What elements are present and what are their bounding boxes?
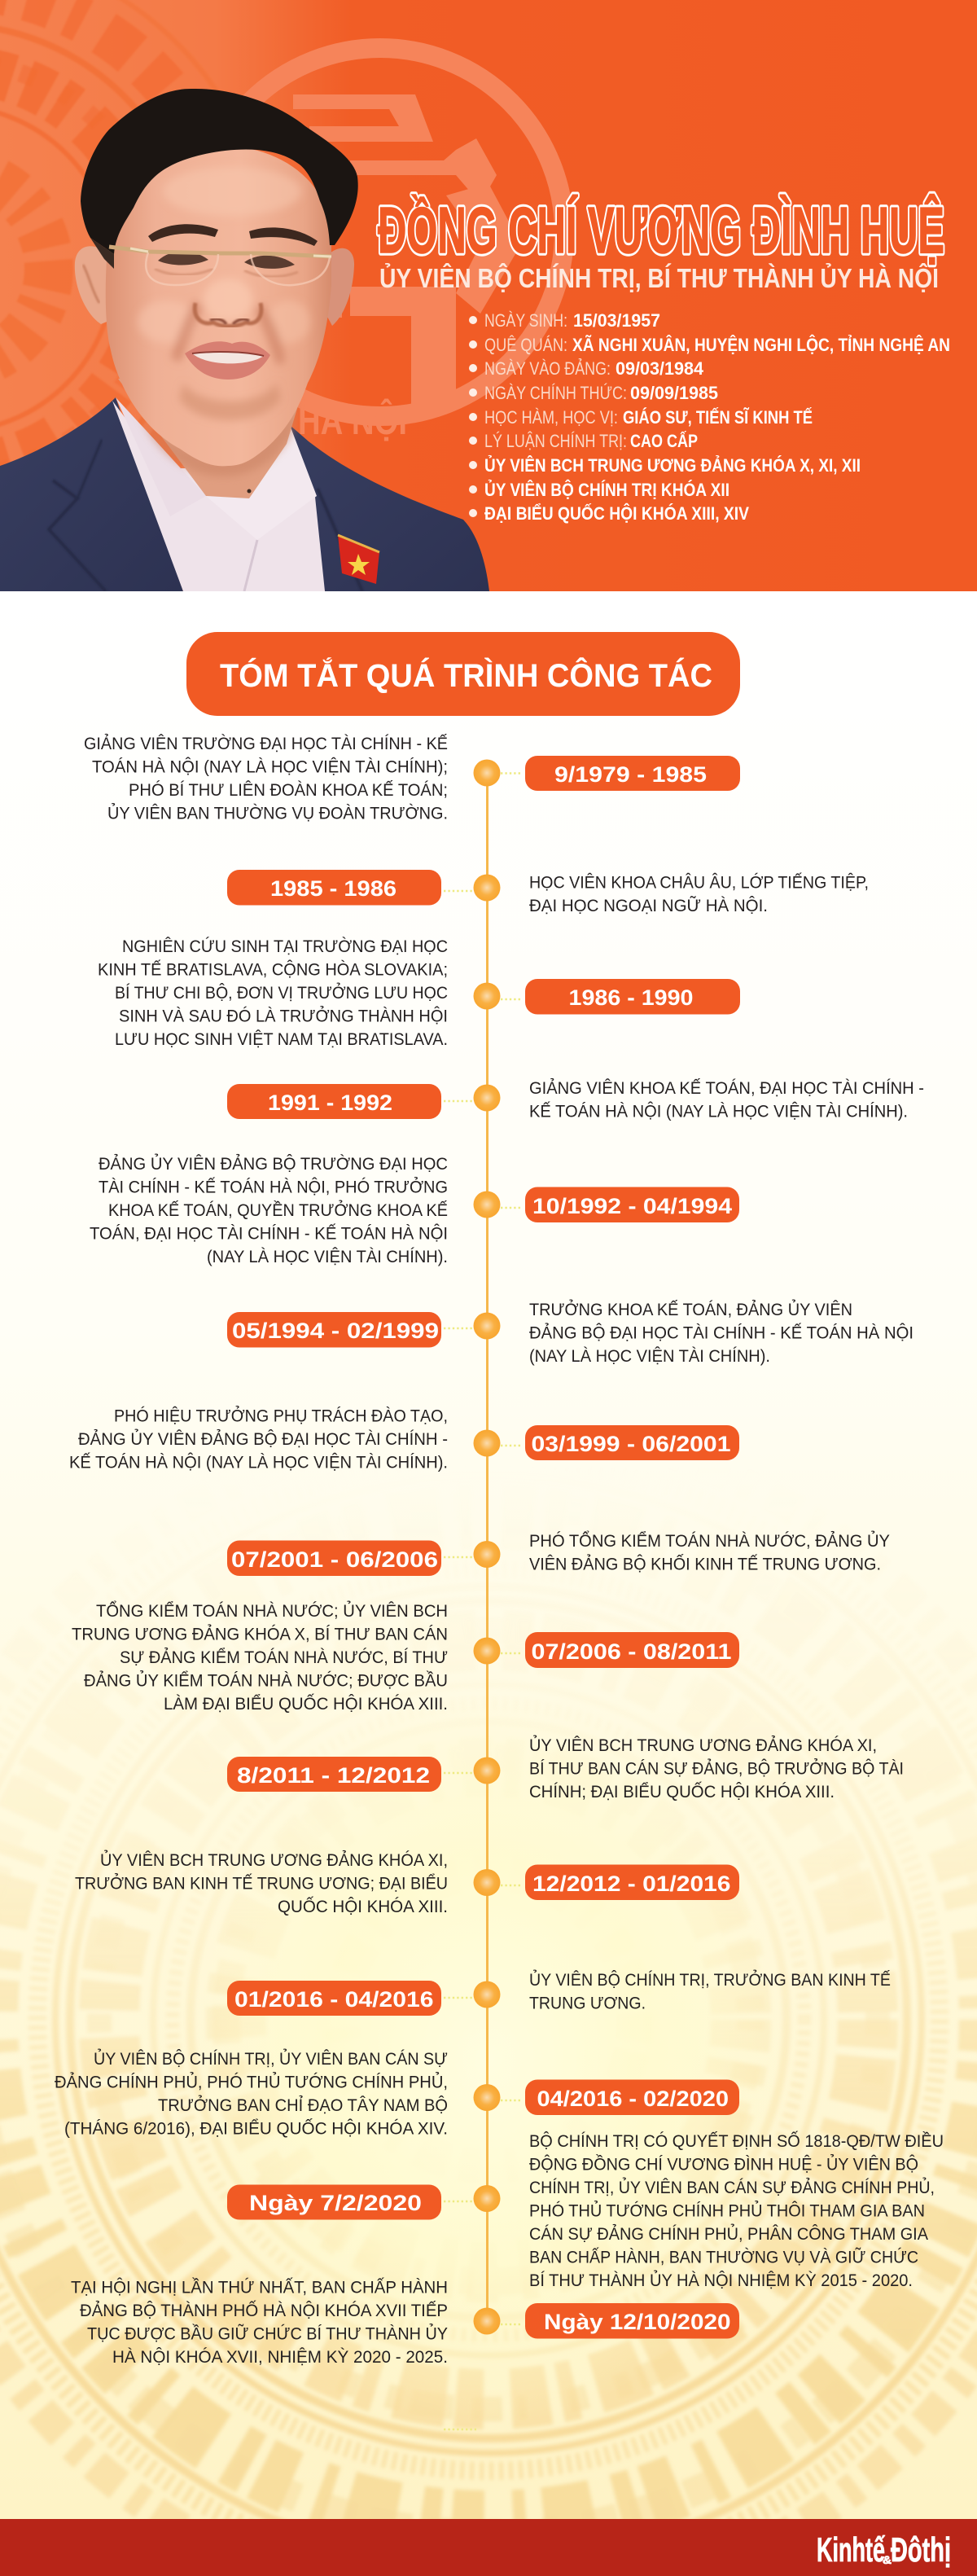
entry 3: 1986 - 1990: KINH TẾ BRATISLAVA, CỘNG HÒA SLOVAKIA;	[98, 959, 448, 979]
footer bar	[0, 2519, 977, 2576]
entry 14: Ngày 7/2/2020: PHÓ THỦ TƯỚNG CHÍNH PHỦ THÔI THAM GIA BAN	[529, 2201, 925, 2220]
personal details list: LÝ LUẬN CHÍNH TRỊ:	[484, 431, 627, 451]
entry 4: 1991 - 1992: KẾ TOÁN HÀ NỘI (NAY LÀ HỌC VIỆN TÀI CHÍNH).	[529, 1101, 908, 1121]
entry 11: 12/2012 - 01/2016: ỦY VIÊN BCH TRUNG ƯƠNG ĐẢNG KHÓA XI,	[100, 1850, 448, 1870]
personal details list: 09/09/1985	[630, 383, 718, 403]
entry 6: 05/1994 - 02/1999	[227, 1299, 913, 1366]
entry 5: 10/1992 - 04/1994: KHOA KẾ TOÁN, QUYỀN TRƯỞNG KHOA KẾ	[108, 1200, 448, 1220]
eyes	[158, 254, 208, 265]
entry 1: 9/1979 - 1985: GIẢNG VIÊN TRƯỜNG ĐẠI HỌC TÀI CHÍNH - KẾ	[84, 733, 448, 753]
entry 8: 07/2001 - 06/2006: VIÊN ĐẢNG BỘ KHỐI KINH TẾ TRUNG ƯƠNG.	[529, 1552, 881, 1573]
entry 11: 12/2012 - 01/2016: TRƯỞNG BAN KINH TẾ TRUNG ƯƠNG; ĐẠI BIỂU	[75, 1873, 448, 1893]
personal details list: 09/03/1984	[616, 358, 704, 379]
entry 8: 07/2001 - 06/2006: PHÓ TỔNG KIỂM TOÁN NHÀ NƯỚC, ĐẢNG ỦY	[529, 1530, 890, 1551]
entry 7: 03/1999 - 06/2001: 03/1999 - 06/2001	[531, 1432, 731, 1456]
entry 11: 12/2012 - 01/2016	[75, 1850, 739, 1916]
personal details list: NGÀY SINH:	[484, 310, 567, 331]
entry 2: 1985 - 1986	[227, 870, 869, 915]
entry 13: 04/2016 - 02/2020: TRƯỞNG BAN CHỈ ĐẠO TÂY NAM BỘ	[158, 2095, 448, 2115]
entry 14: Ngày 7/2/2020: ĐỘNG ĐỒNG CHÍ VƯƠNG ĐÌNH HUỆ - ỦY VIÊN BỘ	[529, 2153, 918, 2174]
entry 2: 1985 - 1986: HỌC VIÊN KHOA CHÂU ÂU, LỚP TIẾNG TIỆP,	[529, 871, 869, 893]
entry 15: Ngày 12/10/2020: TẠI HỘI NGHỊ LẦN THỨ NHẤT, BAN CHẤP HÀNH	[71, 2277, 448, 2297]
entry 9: 07/2006 - 08/2011: ĐẢNG ỦY KIỂM TOÁN NHÀ NƯỚC; ĐƯỢC BẦU	[84, 1670, 448, 1691]
personal details list: CAO CẤP	[630, 431, 698, 451]
entry 5: 10/1992 - 04/1994: TOÁN, ĐẠI HỌC TÀI CHÍNH - KẾ TOÁN HÀ NỘI	[90, 1223, 448, 1243]
entry 3: 1986 - 1990: BÍ THƯ CHI BỘ, ĐƠN VỊ TRƯỞNG LƯU HỌC	[115, 982, 448, 1003]
flag pin	[338, 535, 379, 584]
center glow	[187, 1694, 790, 2427]
personal details list: ỦY VIÊN BỘ CHÍNH TRỊ KHÓA XII	[484, 480, 729, 500]
entry 15: Ngày 12/10/2020: ĐẢNG BỘ THÀNH PHỐ HÀ NỘI KHÓA XVII TIẾP	[80, 2299, 448, 2320]
timeline axis	[486, 773, 488, 2321]
entry 13: 04/2016 - 02/2020	[55, 2048, 739, 2139]
entry 3: 1986 - 1990	[98, 936, 740, 1049]
entry 13: 04/2016 - 02/2020: 04/2016 - 02/2020	[537, 2087, 729, 2111]
entry 3: 1986 - 1990: SINH VÀ SAU ĐÓ LÀ TRƯỞNG THÀNH HỘI	[119, 1005, 448, 1026]
entry 5: 10/1992 - 04/1994: (NAY LÀ HỌC VIỆN TÀI CHÍNH).	[207, 1246, 448, 1266]
entry 1: 9/1979 - 1985: ỦY VIÊN BAN THƯỜNG VỤ ĐOÀN TRƯỜNG.	[107, 803, 448, 823]
entry 9: 07/2006 - 08/2011: SỰ ĐẢNG KIỂM TOÁN NHÀ NƯỚC, BÍ THƯ	[120, 1647, 448, 1667]
personal details list: NGÀY VÀO ĐẢNG:	[484, 358, 611, 379]
hero panel	[0, 0, 977, 591]
entry 8: 07/2001 - 06/2006	[227, 1530, 890, 1576]
entry 3: 1986 - 1990: 1986 - 1990	[568, 985, 694, 1010]
entry 5: 10/1992 - 04/1994: 10/1992 - 04/1994	[532, 1194, 732, 1218]
entry 1: 9/1979 - 1985	[84, 733, 740, 823]
entry 13: 04/2016 - 02/2020: ỦY VIÊN BỘ CHÍNH TRỊ, ỦY VIÊN BAN CÁN SỰ	[94, 2048, 448, 2069]
entry 9: 07/2006 - 08/2011	[72, 1600, 739, 1714]
personal details list: 15/03/1957	[573, 310, 660, 331]
entry 3: 1986 - 1990: NGHIÊN CỨU SINH TẠI TRƯỜNG ĐẠI HỌC	[122, 936, 448, 956]
logo: Kinh tế & Đô thị: Đôthị	[891, 2530, 951, 2569]
personal details list: QUÊ QUÁN:	[484, 335, 567, 355]
neck	[118, 379, 301, 498]
personal details list: NGÀY CHÍNH THỨC:	[484, 383, 627, 403]
entry 9: 07/2006 - 08/2011: TRUNG ƯƠNG ĐẢNG KHÓA X, BÍ THƯ BAN CÁN	[72, 1624, 448, 1643]
entry 9: 07/2006 - 08/2011: TỔNG KIỂM TOÁN NHÀ NƯỚC; ỦY VIÊN BCH	[96, 1600, 448, 1621]
entry 15: Ngày 12/10/2020: TỤC ĐƯỢC BẦU GIỮ CHỨC BÍ THƯ THÀNH ỦY	[87, 2323, 448, 2344]
hero drum pattern	[0, 0, 218, 466]
entry 13: 04/2016 - 02/2020: (THÁNG 6/2016), ĐẠI BIỂU QUỐC HỘI KHÓA XIV.	[64, 2117, 448, 2139]
entry 7: 03/1999 - 06/2001: ĐẢNG ỦY VIÊN ĐẢNG BỘ ĐẠI HỌC TÀI CHÍNH -	[78, 1428, 448, 1449]
entry 5: 10/1992 - 04/1994	[90, 1153, 739, 1266]
personal details list: ĐẠI BIỂU QUỐC HỘI KHÓA XIII, XIV	[484, 502, 749, 524]
section heading	[186, 632, 740, 716]
entry 3: 1986 - 1990: LƯU HỌC SINH VIỆT NAM TẠI BRATISLAVA.	[115, 1029, 448, 1049]
entry 11: 12/2012 - 01/2016: 12/2012 - 01/2016	[532, 1872, 731, 1896]
entry 7: 03/1999 - 06/2001: KẾ TOÁN HÀ NỘI (NAY LÀ HỌC VIỆN TÀI CHÍNH).	[69, 1451, 448, 1472]
entry 7: 03/1999 - 06/2001	[69, 1406, 739, 1472]
entry 2: 1985 - 1986: ĐẠI HỌC NGOẠI NGỮ HÀ NỘI.	[529, 895, 768, 915]
personal details list: GIÁO SƯ, TIẾN SĨ KINH TẾ	[623, 407, 813, 428]
logo: Kinh tế & Đô thị: Kinhtế	[817, 2530, 885, 2569]
entry 14: Ngày 7/2/2020: Ngày 7/2/2020	[249, 2191, 422, 2215]
hair	[81, 89, 358, 254]
nose	[195, 303, 261, 326]
page background	[0, 591, 977, 2519]
entry 5: 10/1992 - 04/1994: ĐẢNG ỦY VIÊN ĐẢNG BỘ TRƯỜNG ĐẠI HỌC	[99, 1153, 448, 1174]
entry 14: Ngày 7/2/2020: CHÍNH TRỊ, ỦY VIÊN BAN CÁN SỰ ĐẢNG CHÍNH PHỦ,	[529, 2177, 935, 2197]
entry 12: 01/2016 - 04/2016: ỦY VIÊN BỘ CHÍNH TRỊ, TRƯỞNG BAN KINH TẾ	[529, 1969, 891, 1990]
entry 14: Ngày 7/2/2020	[227, 2130, 944, 2290]
personal details list: HỌC HÀM, HỌC VỊ:	[484, 407, 618, 428]
entry 10: 8/2011 - 12/2012	[227, 1735, 904, 1801]
emblem text: HÀ NỘI: HÀ NỘI	[298, 398, 407, 443]
entry 14: Ngày 7/2/2020: CÁN SỰ ĐẢNG CHÍNH PHỦ, PHÂN CÔNG THAM GIA	[529, 2223, 929, 2244]
entry 14: Ngày 7/2/2020: BÍ THƯ THÀNH ỦY HÀ NỘI NHIỆM KỲ 2015 - 2020.	[529, 2270, 913, 2290]
entry 12: 01/2016 - 04/2016	[227, 1969, 891, 2016]
entry 10: 8/2011 - 12/2012: 8/2011 - 12/2012	[237, 1763, 430, 1788]
face shading	[138, 167, 310, 420]
entry 14: Ngày 7/2/2020: BỘ CHÍNH TRỊ CÓ QUYẾT ĐỊNH SỐ 1818-QĐ/TW ĐIỀU	[529, 2130, 944, 2151]
entry 15: Ngày 12/10/2020	[71, 2277, 739, 2367]
suit	[0, 397, 183, 591]
face	[106, 145, 331, 466]
mouth	[185, 341, 270, 380]
timeline dots and connectors	[444, 759, 523, 2429]
logo: Kinh tế & Đô thị: &	[883, 2553, 892, 2566]
eyebrows	[148, 224, 218, 242]
mole	[248, 489, 251, 494]
glasses	[109, 247, 331, 285]
personal details list: ỦY VIÊN BCH TRUNG ƯƠNG ĐẢNG KHÓA X, XI, XII	[484, 455, 861, 476]
entry 12: 01/2016 - 04/2016: TRUNG ƯƠNG.	[529, 1994, 646, 2013]
entry 4: 1991 - 1992	[227, 1077, 924, 1121]
entry 7: 03/1999 - 06/2001: PHÓ HIỆU TRƯỞNG PHỤ TRÁCH ĐÀO TẠO,	[114, 1406, 448, 1425]
entry 4: 1991 - 1992: GIẢNG VIÊN KHOA KẾ TOÁN, ĐẠI HỌC TÀI CHÍNH -	[529, 1077, 924, 1098]
entry 14: Ngày 7/2/2020: BAN CHẤP HÀNH, BAN THƯỜNG VỤ VÀ GIỮ CHỨC	[529, 2246, 918, 2267]
entry 8: 07/2001 - 06/2006: 07/2001 - 06/2006	[231, 1547, 438, 1572]
entry 10: 8/2011 - 12/2012: BÍ THƯ BAN CÁN SỰ ĐẢNG, BỘ TRƯỞNG BỘ TÀI	[529, 1758, 904, 1779]
entry 6: 05/1994 - 02/1999: (NAY LÀ HỌC VIỆN TÀI CHÍNH).	[529, 1345, 770, 1366]
entry 15: Ngày 12/10/2020: HÀ NỘI KHÓA XVII, NHIỆM KỲ 2020 - 2025.	[112, 2346, 448, 2367]
entry 11: 12/2012 - 01/2016: QUỐC HỘI KHÓA XIII.	[278, 1895, 448, 1916]
background pattern: bronze drum	[0, 1663, 977, 2519]
hero background	[0, 0, 977, 591]
entry 1: 9/1979 - 1985: PHÓ BÍ THƯ LIÊN ĐOÀN KHOA KẾ TOÁN;	[129, 779, 448, 800]
entry 9: 07/2006 - 08/2011: LÀM ĐẠI BIỂU QUỐC HỘI KHÓA XIII.	[164, 1692, 448, 1714]
portrait	[0, 89, 489, 591]
entry 12: 01/2016 - 04/2016: 01/2016 - 04/2016	[234, 1987, 433, 2012]
ears	[75, 246, 107, 324]
section heading: TÓM TẮT QUÁ TRÌNH CÔNG TÁC	[220, 656, 712, 694]
entry 6: 05/1994 - 02/1999: 05/1994 - 02/1999	[232, 1319, 439, 1343]
entry 5: 10/1992 - 04/1994: TÀI CHÍNH - KẾ TOÁN HÀ NỘI, PHÓ TRƯỞNG	[99, 1176, 448, 1197]
entry 9: 07/2006 - 08/2011: 07/2006 - 08/2011	[531, 1639, 731, 1664]
personal details list	[469, 310, 950, 524]
entry 13: 04/2016 - 02/2020: ĐẢNG CHÍNH PHỦ, PHÓ THỦ TƯỚNG CHÍNH PHỦ,	[55, 2072, 448, 2091]
entry 1: 9/1979 - 1985: 9/1979 - 1985	[554, 762, 707, 787]
entry 2: 1985 - 1986: 1985 - 1986	[270, 876, 396, 901]
entry 15: Ngày 12/10/2020: Ngày 12/10/2020	[544, 2310, 731, 2334]
entry 10: 8/2011 - 12/2012: CHÍNH; ĐẠI BIỂU QUỐC HỘI KHÓA XIII.	[529, 1780, 835, 1801]
entry 4: 1991 - 1992: 1991 - 1992	[268, 1091, 392, 1115]
entry 1: 9/1979 - 1985: TOÁN HÀ NỘI (NAY LÀ HỌC VIỆN TÀI CHÍNH);	[92, 756, 448, 777]
entry 6: 05/1994 - 02/1999: ĐẢNG BỘ ĐẠI HỌC TÀI CHÍNH - KẾ TOÁN HÀ NỘI	[529, 1323, 913, 1342]
Hanoi emblem watermark	[196, 48, 564, 416]
entry 10: 8/2011 - 12/2012: ỦY VIÊN BCH TRUNG ƯƠNG ĐẢNG KHÓA XI,	[529, 1735, 877, 1755]
entry 6: 05/1994 - 02/1999: TRƯỞNG KHOA KẾ TOÁN, ĐẢNG ỦY VIÊN	[529, 1299, 852, 1319]
shirt	[112, 401, 325, 591]
